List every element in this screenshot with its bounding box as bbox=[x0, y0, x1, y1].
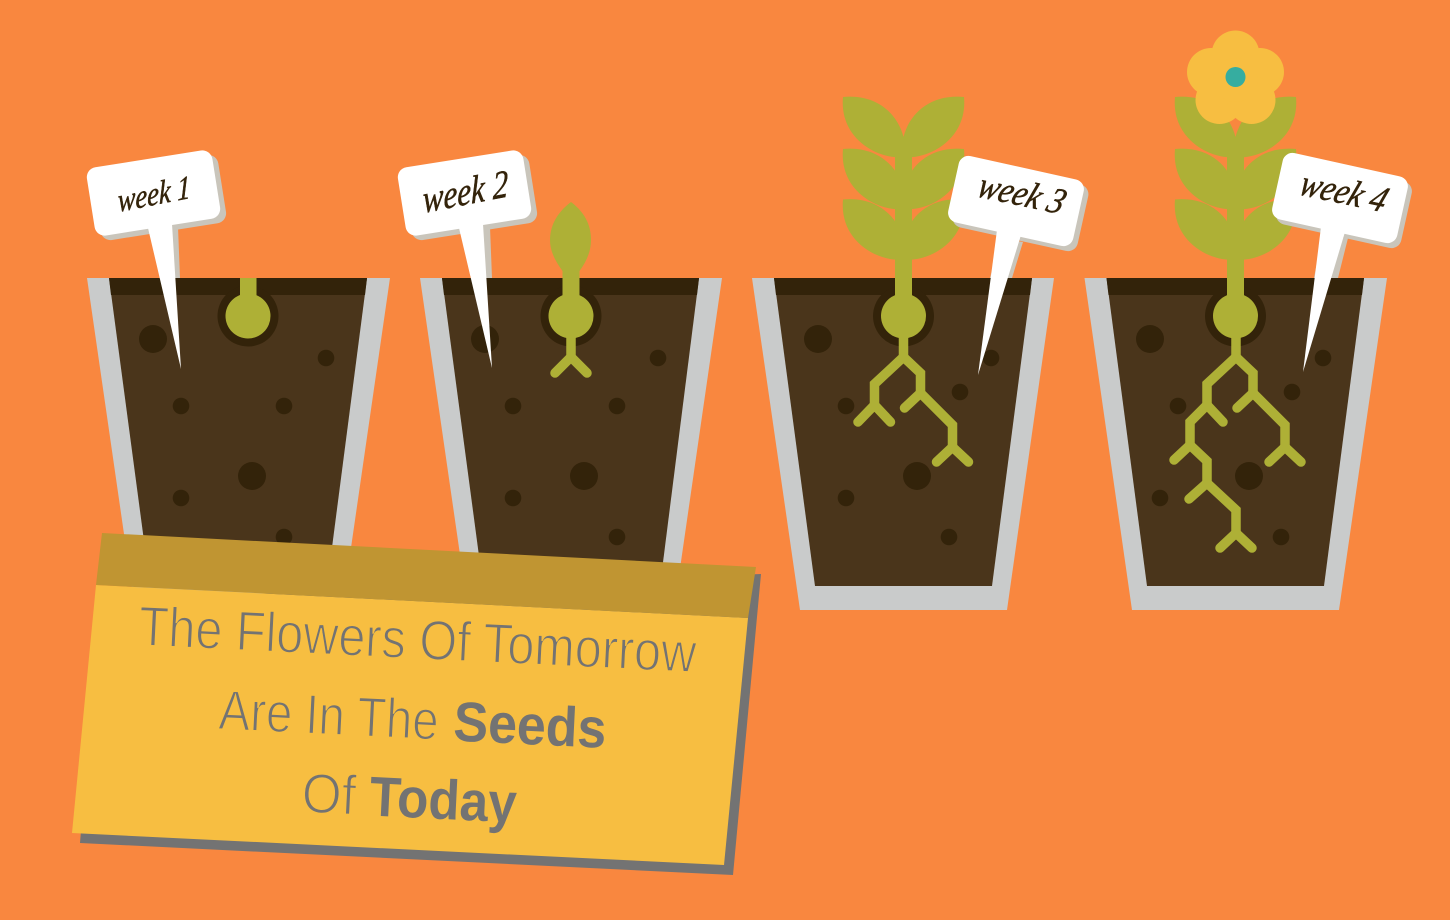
pot 4 stem and seed bbox=[1205, 137, 1266, 346]
pot 3 leaves bbox=[843, 97, 964, 260]
quote line 3 bbox=[300, 761, 518, 834]
tag 3 shadow bbox=[951, 159, 1090, 278]
quote line 2: Are In The bbox=[217, 678, 440, 752]
quote line 3: Of bbox=[300, 761, 358, 827]
card body bbox=[72, 585, 748, 865]
flower centre bbox=[1226, 67, 1246, 87]
pot 2 sprout bbox=[540, 202, 602, 373]
pot 4: week 4 bbox=[1084, 30, 1387, 610]
pot 2 soil surface bbox=[442, 278, 699, 295]
tag 1 label: week 1 bbox=[117, 169, 191, 220]
tag 1 shadow bbox=[91, 153, 228, 278]
tag 1 board bbox=[85, 149, 222, 369]
pot 4 roots bbox=[1174, 335, 1301, 548]
plant tag: week 3 bbox=[946, 154, 1090, 375]
card shadow bbox=[80, 574, 761, 875]
pot 1: week 1 bbox=[87, 278, 390, 610]
pot 1 soil stones bbox=[139, 325, 334, 545]
tag 3 board bbox=[946, 154, 1086, 375]
quote line 3: Today bbox=[368, 764, 518, 834]
pot 3 soil surface bbox=[774, 278, 1032, 295]
quote card bbox=[72, 533, 761, 875]
pot 2 soil stones bbox=[471, 325, 666, 545]
quote line 2 bbox=[217, 678, 608, 760]
pot 2 container bbox=[420, 278, 722, 610]
pot 1 seed bbox=[218, 278, 278, 346]
pot 1 soil surface bbox=[109, 278, 367, 295]
pot 4 leaves bbox=[1175, 97, 1296, 260]
pot 3 container bbox=[752, 278, 1054, 610]
tag 2 board bbox=[396, 149, 533, 368]
pot 2: week 2 bbox=[420, 202, 722, 610]
tag 2 label: week 2 bbox=[422, 161, 509, 222]
pot 4 flower bbox=[1187, 30, 1284, 124]
card header strip bbox=[96, 533, 756, 618]
quote line 1: The Flowers Of Tomorrow bbox=[137, 594, 698, 684]
tag 4 shadow bbox=[1274, 156, 1414, 278]
pot 4 soil surface bbox=[1106, 278, 1364, 295]
plant tag: week 4 bbox=[1270, 151, 1414, 372]
pot 2 soil bbox=[442, 278, 699, 586]
pot 1 soil bbox=[109, 278, 367, 586]
pot 4 soil bbox=[1106, 278, 1364, 586]
pot 3: week 3 bbox=[752, 97, 1054, 610]
plant tag: week 1 bbox=[85, 149, 228, 369]
pot 4 container bbox=[1084, 278, 1387, 610]
pot 4 soil stones bbox=[1136, 325, 1331, 545]
pot 1 container bbox=[87, 278, 390, 610]
plant tag: week 2 bbox=[396, 149, 539, 368]
tag 4 label: week 4 bbox=[1294, 164, 1394, 220]
pot 3 roots bbox=[858, 335, 968, 462]
pot 3 stem and seed bbox=[873, 137, 934, 346]
tag 4 board bbox=[1270, 151, 1410, 372]
pot 3 soil stones bbox=[804, 325, 999, 545]
tag 3 label: week 3 bbox=[972, 166, 1072, 222]
pot 3 soil bbox=[774, 278, 1032, 586]
tag 2 shadow bbox=[402, 153, 539, 278]
quote line 2: Seeds bbox=[452, 690, 608, 760]
